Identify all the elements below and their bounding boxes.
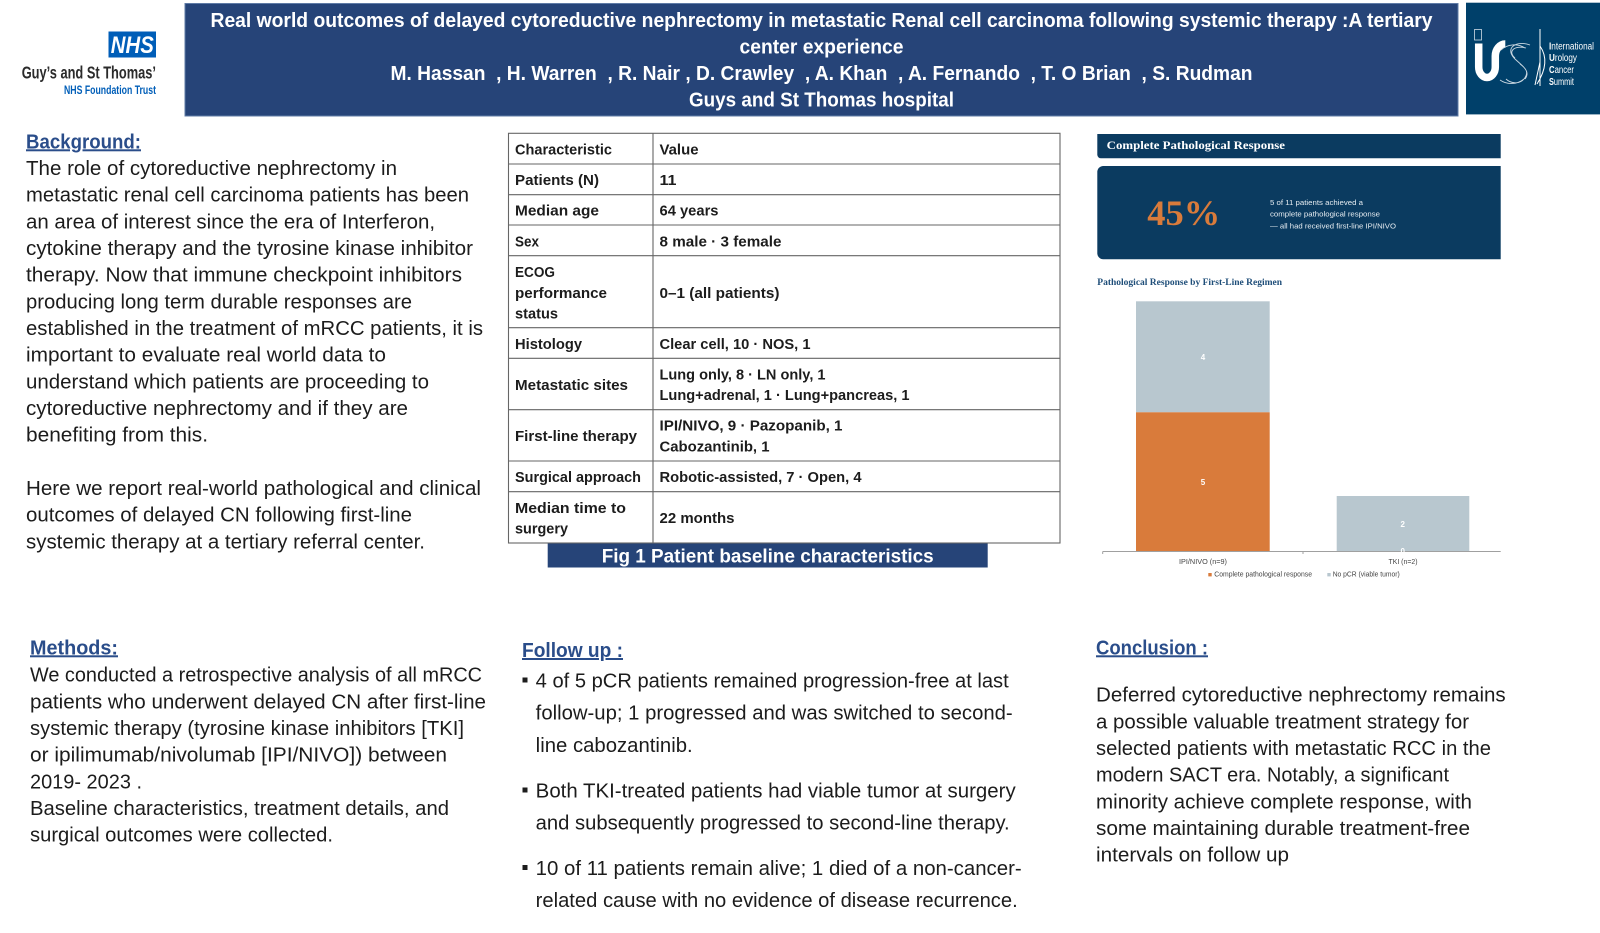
text block: background [26,158,483,553]
text block: conclusion: intervals on follow up [1096,845,1289,867]
logo: International Urology Cancer Summit: Cancer [1549,65,1575,76]
table: patient baseline characteristics: status [515,307,558,323]
table: patient baseline characteristics: performance [515,286,607,302]
table: patient baseline characteristics: Value [660,142,698,158]
table: patient baseline characteristics: Sex [515,234,539,250]
panel: background [26,131,483,553]
text block: background: metastatic renal cell carcinoma patients has been [26,185,469,207]
heading: methods: Methods: [30,637,118,659]
text block: background: established in the treatment of mRCC patients, it is [26,318,483,340]
table: patient baseline characteristics: ECOG [515,265,555,281]
text block: background: cytoreductive nephrectomy and if they are [26,398,408,420]
table: patient baseline characteristics: Characteristic [515,142,612,158]
table: patient baseline characteristics [508,133,1060,543]
title banner [185,4,1458,116]
table: patient baseline characteristics: Lung only, 8 · LN only, 1 [660,368,826,384]
table: patient baseline characteristics: IPI/NIVO, 9 · Pazopanib, 1 [660,419,842,435]
stat card: 45%: — all had received first-line IPI/NIVO [1270,221,1396,230]
title banner: Real world outcomes of delayed cytoreductive nephrectomy in metastatic Renal cell carcinoma following systemic therapy :A tertiary [210,10,1433,32]
text block: conclusion: some maintaining durable treatment-free [1096,818,1470,840]
text block: methods: surgical outcomes were collected. [30,825,333,847]
text block: conclusion: selected patients with metastatic RCC in the [1096,738,1491,760]
text block: background: outcomes of delayed CN following first-line [26,505,412,527]
table: patient baseline characteristics: First-line therapy [515,429,637,445]
chart legend [1208,570,1400,579]
stacked bar chart: pathological response by regimen: 0 [1400,547,1405,556]
text block: background: producing long term durable responses are [26,291,412,313]
stacked bar chart: pathological response by regimen: TKI (n=2) [1388,557,1418,566]
stat card: 45%: 45% [1147,193,1220,233]
text block: background: therapy. Now that immune checkpoint inhibitors [26,265,462,287]
table: patient baseline characteristics: 22 months [660,511,734,527]
logo: NHS Guy's and St Thomas': NHS [111,32,154,59]
stacked bar chart: pathological response by regimen: IPI/NIVO (n=9) [1179,557,1227,566]
stat card: 45%: complete pathological response [1270,210,1380,219]
text block: conclusion: Deferred cytoreductive nephrectomy remains [1096,685,1506,707]
panel: methods [30,637,486,847]
panel: conclusion [1096,637,1506,867]
title banner: M. Hassan , H. Warren , R. Nair , D. Crawley , A. Khan , A. Fernando , T. O Brian , S. Rudman [390,63,1252,85]
table: patient baseline characteristics: Clear cell, 10 · NOS, 1 [660,337,810,353]
bullet list: follow up: 4 of 5 pCR patients remained progression-free at last [536,670,1009,692]
bullet list: follow up: 10 of 11 patients remain alive; 1 died of a non-cancer- [536,858,1022,880]
card header: complete pathological response: Complete Pathological Response [1107,140,1285,152]
text block: methods: systemic therapy (tyrosine kinase inhibitors [TKI] [30,718,464,740]
table: patient baseline characteristics: Lung+adrenal, 1 · Lung+pancreas, 1 [660,388,910,404]
text block: conclusion [1096,685,1506,867]
bullet list: follow up: and subsequently progressed to second-line therapy. [536,813,1010,835]
table: patient baseline characteristics: Metastatic sites [515,378,628,394]
chart legend: Complete pathological response [1214,570,1312,579]
bullet list: follow up: line cabozantinib. [536,735,693,757]
heading: background: Background: [26,131,141,153]
text block: background: benefiting from this. [26,425,208,447]
card header: complete pathological response [1097,134,1501,158]
text block: methods: Baseline characteristics, treatment details, and [30,798,449,820]
text block: conclusion: a possible valuable treatment strategy for [1096,711,1469,733]
stacked bar chart: pathological response by regimen: 2 [1400,520,1405,529]
text block: methods: We conducted a retrospective analysis of all mRCC [30,665,482,687]
text block: background: systemic therapy at a tertiary referral center. [26,531,425,553]
table: patient baseline characteristics: 11 [660,173,676,189]
chart legend: No pCR (viable tumor) [1333,570,1400,579]
title banner: center experience [740,36,904,58]
logo: NHS Guy's and St Thomas' [22,32,156,97]
table: patient baseline characteristics: Histology [515,337,582,353]
text block: methods: or ipilimumab/nivolumab [IPI/NIVO]) between [30,745,447,767]
table: patient baseline characteristics: Median age [515,204,599,220]
text block: background: The role of cytoreductive nephrectomy in [26,158,397,180]
text block: methods [30,665,486,847]
bullet list: follow up [522,670,1022,912]
table: patient baseline characteristics: Median time to [515,501,626,517]
text block: background: cytokine therapy and the tyrosine kinase inhibitor [26,238,473,260]
figure caption: Fig 1 Patient baseline characteristics [602,546,934,568]
text block: methods: 2019- 2023 . [30,771,142,793]
bullet list: follow up: follow-up; 1 progressed and was switched to second- [536,703,1013,725]
logo: NHS Guy's and St Thomas': NHS Foundation Trust [64,83,156,97]
table: patient baseline characteristics: 64 years [660,204,718,220]
text block: background: understand which patients are proceeding to [26,371,429,393]
table: patient baseline characteristics: 0–1 (all patients) [660,286,780,302]
table: patient baseline characteristics: Surgical approach [515,470,641,486]
logo: International Urology Cancer Summit: Urology [1549,53,1577,64]
bullet list: follow up: related cause with no evidence of disease recurrence. [536,890,1018,912]
text block: background: important to evaluate real world data to [26,345,386,367]
stat card: 45% [1097,166,1501,259]
logo: International Urology Cancer Summit [1466,3,1600,114]
text block: background: Here we report real-world pathological and clinical [26,478,481,500]
stacked bar chart: pathological response by regimen [1103,301,1501,579]
logo: NHS Guy's and St Thomas': Guy’s and St Thomas’ [22,62,156,82]
heading: conclusion: Conclusion : [1096,637,1208,659]
table: patient baseline characteristics: Cabozantinib, 1 [660,439,770,455]
table: patient baseline characteristics: Robotic-assisted, 7 · Open, 4 [660,470,862,486]
text block: methods: patients who underwent delayed CN after first-line [30,691,486,713]
stacked bar chart: pathological response by regimen: 5 [1201,478,1206,487]
text block: background: an area of interest since the era of Interferon, [26,211,435,233]
table: patient baseline characteristics: 8 male · 3 female [660,234,782,250]
heading: follow up: Follow up : [522,640,623,662]
title banner: Guys and St Thomas hospital [689,90,954,112]
stacked bar chart: pathological response by regimen: 4 [1201,353,1206,362]
figure caption [548,544,988,568]
table: patient baseline characteristics: surgery [515,522,568,538]
table: patient baseline characteristics: Patients (N) [515,173,599,189]
bullet list: follow up: Both TKI-treated patients had viable tumor at surgery [536,780,1016,802]
logo: International Urology Cancer Summit: Summit [1549,77,1574,88]
chart heading: Pathological Response by First-Line Regimen [1097,278,1283,288]
text block: conclusion: modern SACT era. Notably, a significant [1096,765,1449,787]
text block: conclusion: minority achieve complete response, with [1096,791,1472,813]
panel: follow up [522,640,1022,912]
stat card: 45%: 5 of 11 patients achieved a [1270,198,1364,207]
